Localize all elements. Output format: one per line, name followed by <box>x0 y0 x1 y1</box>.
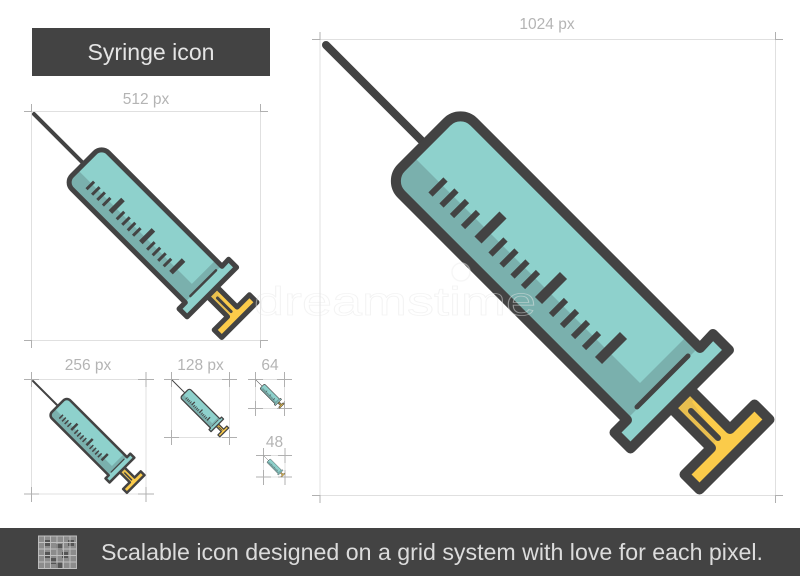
panel: 128 px preview: 128 px <box>177 357 224 374</box>
panel: 128 px preview <box>164 357 237 445</box>
icon: syringe 128 <box>172 380 229 437</box>
icon: syringe 1024 <box>326 45 770 490</box>
icon: syringe 64 <box>256 380 284 408</box>
panel: 64 px preview: 64 <box>261 357 279 374</box>
panel: 64 px preview <box>248 357 292 416</box>
watermark <box>254 263 536 324</box>
footer caption: Scalable icon designed on a grid system with love for each pixel. <box>101 539 763 565</box>
panel: 1024 px preview: 1024 px <box>519 16 575 33</box>
footer bar <box>0 528 800 576</box>
panel: 256 px preview <box>24 357 154 502</box>
panel: 256 px preview: 256 px <box>65 357 112 374</box>
watermark: dreamstime <box>254 280 536 324</box>
icon: pixel grid <box>38 536 76 569</box>
icon: syringe 512 <box>34 114 257 337</box>
panel: 48 px preview <box>256 434 292 485</box>
icon: syringe 256 <box>33 381 145 493</box>
panel: 512 px preview <box>24 91 268 348</box>
icon: syringe 48 <box>264 456 285 477</box>
panel: 48 px preview: 48 <box>266 434 283 451</box>
panel: 512 px preview: 512 px <box>123 91 170 108</box>
title banner: Syringe icon <box>88 39 214 65</box>
title banner <box>32 28 270 76</box>
